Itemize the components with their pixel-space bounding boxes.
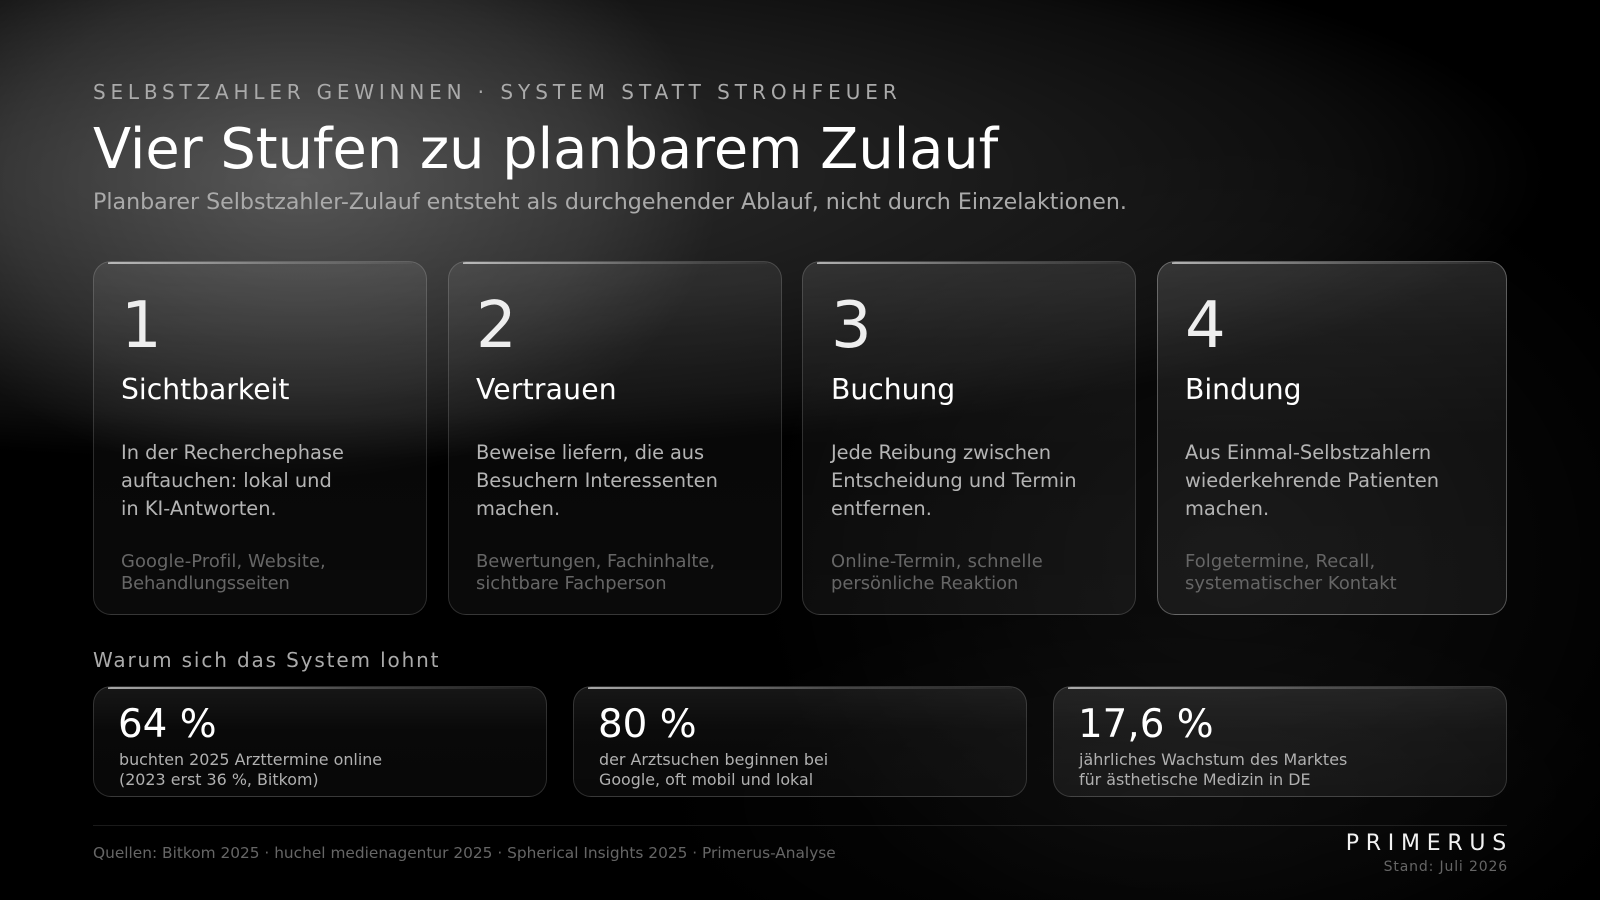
panel: Stufe 1 Sichtbarkeit <box>93 261 427 615</box>
stat description: für ästhetische Medizin in DE <box>1079 770 1311 789</box>
heading: Sichtbarkeit: Sichtbarkeit <box>121 373 289 406</box>
text: description 2: Beweise liefern, die aus <box>476 441 704 464</box>
stat description <box>119 750 382 789</box>
panel: stat 17,6 % <box>1053 686 1507 797</box>
stat description: jährliches Wachstum des Marktes <box>1079 750 1347 769</box>
text: description 1: In der Recherchephase <box>121 441 344 464</box>
stat value: 80 % <box>598 702 697 747</box>
text: examples 2 <box>476 551 715 594</box>
number 2: 2 <box>476 289 517 363</box>
title: Vier Stufen zu planbarem Zulauf <box>93 117 998 182</box>
text: examples 1: Google-Profil, Website, <box>121 551 326 572</box>
text: examples 3: persönliche Reaktion <box>831 573 1018 594</box>
brand: PRIMERUS <box>1346 831 1513 856</box>
text: description 2 <box>476 441 718 520</box>
text: examples 3 <box>831 551 1043 594</box>
heading: Bindung: Bindung <box>1185 373 1302 406</box>
stat description: buchten 2025 Arzttermine online <box>119 750 382 769</box>
stat description: der Arztsuchen beginnen bei <box>599 750 828 769</box>
panel: Stufe 2 Vertrauen <box>448 261 782 615</box>
stat description <box>599 750 828 789</box>
stat description: Google, oft mobil und lokal <box>599 770 813 789</box>
text: examples 1 <box>121 551 326 594</box>
section heading: Warum sich das System lohnt <box>93 648 440 672</box>
heading: Vertrauen: Vertrauen <box>476 373 617 406</box>
stat description <box>1078 750 1347 789</box>
text: description 2: machen. <box>476 497 560 520</box>
number 1: 1 <box>121 289 162 363</box>
text: description 2: Besuchern Interessenten <box>476 469 718 492</box>
text: description 4: machen. <box>1185 497 1269 520</box>
text: examples 4: Folgetermine, Recall, <box>1185 551 1375 572</box>
footer divider <box>93 825 1507 826</box>
stat value: 64 % <box>118 702 217 747</box>
heading: Buchung: Buchung <box>831 373 955 406</box>
text: examples 1: Behandlungsseiten <box>121 573 290 594</box>
stat description: (2023 erst 36 %, Bitkom) <box>119 770 319 789</box>
text: examples 3: Online-Termin, schnelle <box>831 551 1043 572</box>
panel: stat 64 % <box>93 686 547 797</box>
text: description 4: Aus Einmal-Selbstzahlern <box>1185 441 1431 464</box>
text: description 3: entfernen. <box>831 497 932 520</box>
panel: stat 80 % <box>573 686 1027 797</box>
number 3: 3 <box>831 289 872 363</box>
text: description 3: Jede Reibung zwischen <box>831 441 1051 464</box>
text: examples 4 <box>1185 551 1397 594</box>
date: Stand: Juli 2026 <box>1384 859 1508 875</box>
text: description 3 <box>830 441 1077 520</box>
eyebrow: SELBSTZAHLER GEWINNEN · SYSTEM STATT STROHFEUER <box>93 80 902 104</box>
text: examples 2: sichtbare Fachperson <box>476 573 667 594</box>
number 4: 4 <box>1185 289 1226 363</box>
text: description 1 <box>121 441 344 520</box>
sources: Quellen: Bitkom 2025 · huchel medienagentur 2025 · Spherical Insights 2025 · Primerus-Analyse <box>93 844 836 862</box>
stat value: 17,6 % <box>1078 702 1214 747</box>
text: description 4 <box>1185 441 1439 520</box>
text: description 1: auftauchen: lokal und <box>121 469 332 492</box>
text: description 4: wiederkehrende Patienten <box>1185 469 1439 492</box>
text: examples 4: systematischer Kontakt <box>1185 573 1397 594</box>
subtitle: Planbarer Selbstzahler-Zulauf entsteht als durchgehender Ablauf, nicht durch Einzelaktionen. <box>93 189 1127 215</box>
panel: Stufe 4 Bindung <box>1157 261 1507 615</box>
panel: Stufe 3 Buchung <box>802 261 1136 615</box>
text: description 1: in KI-Antworten. <box>121 497 277 520</box>
text: description 3: Entscheidung und Termin <box>831 469 1077 492</box>
text: examples 2: Bewertungen, Fachinhalte, <box>476 551 715 572</box>
